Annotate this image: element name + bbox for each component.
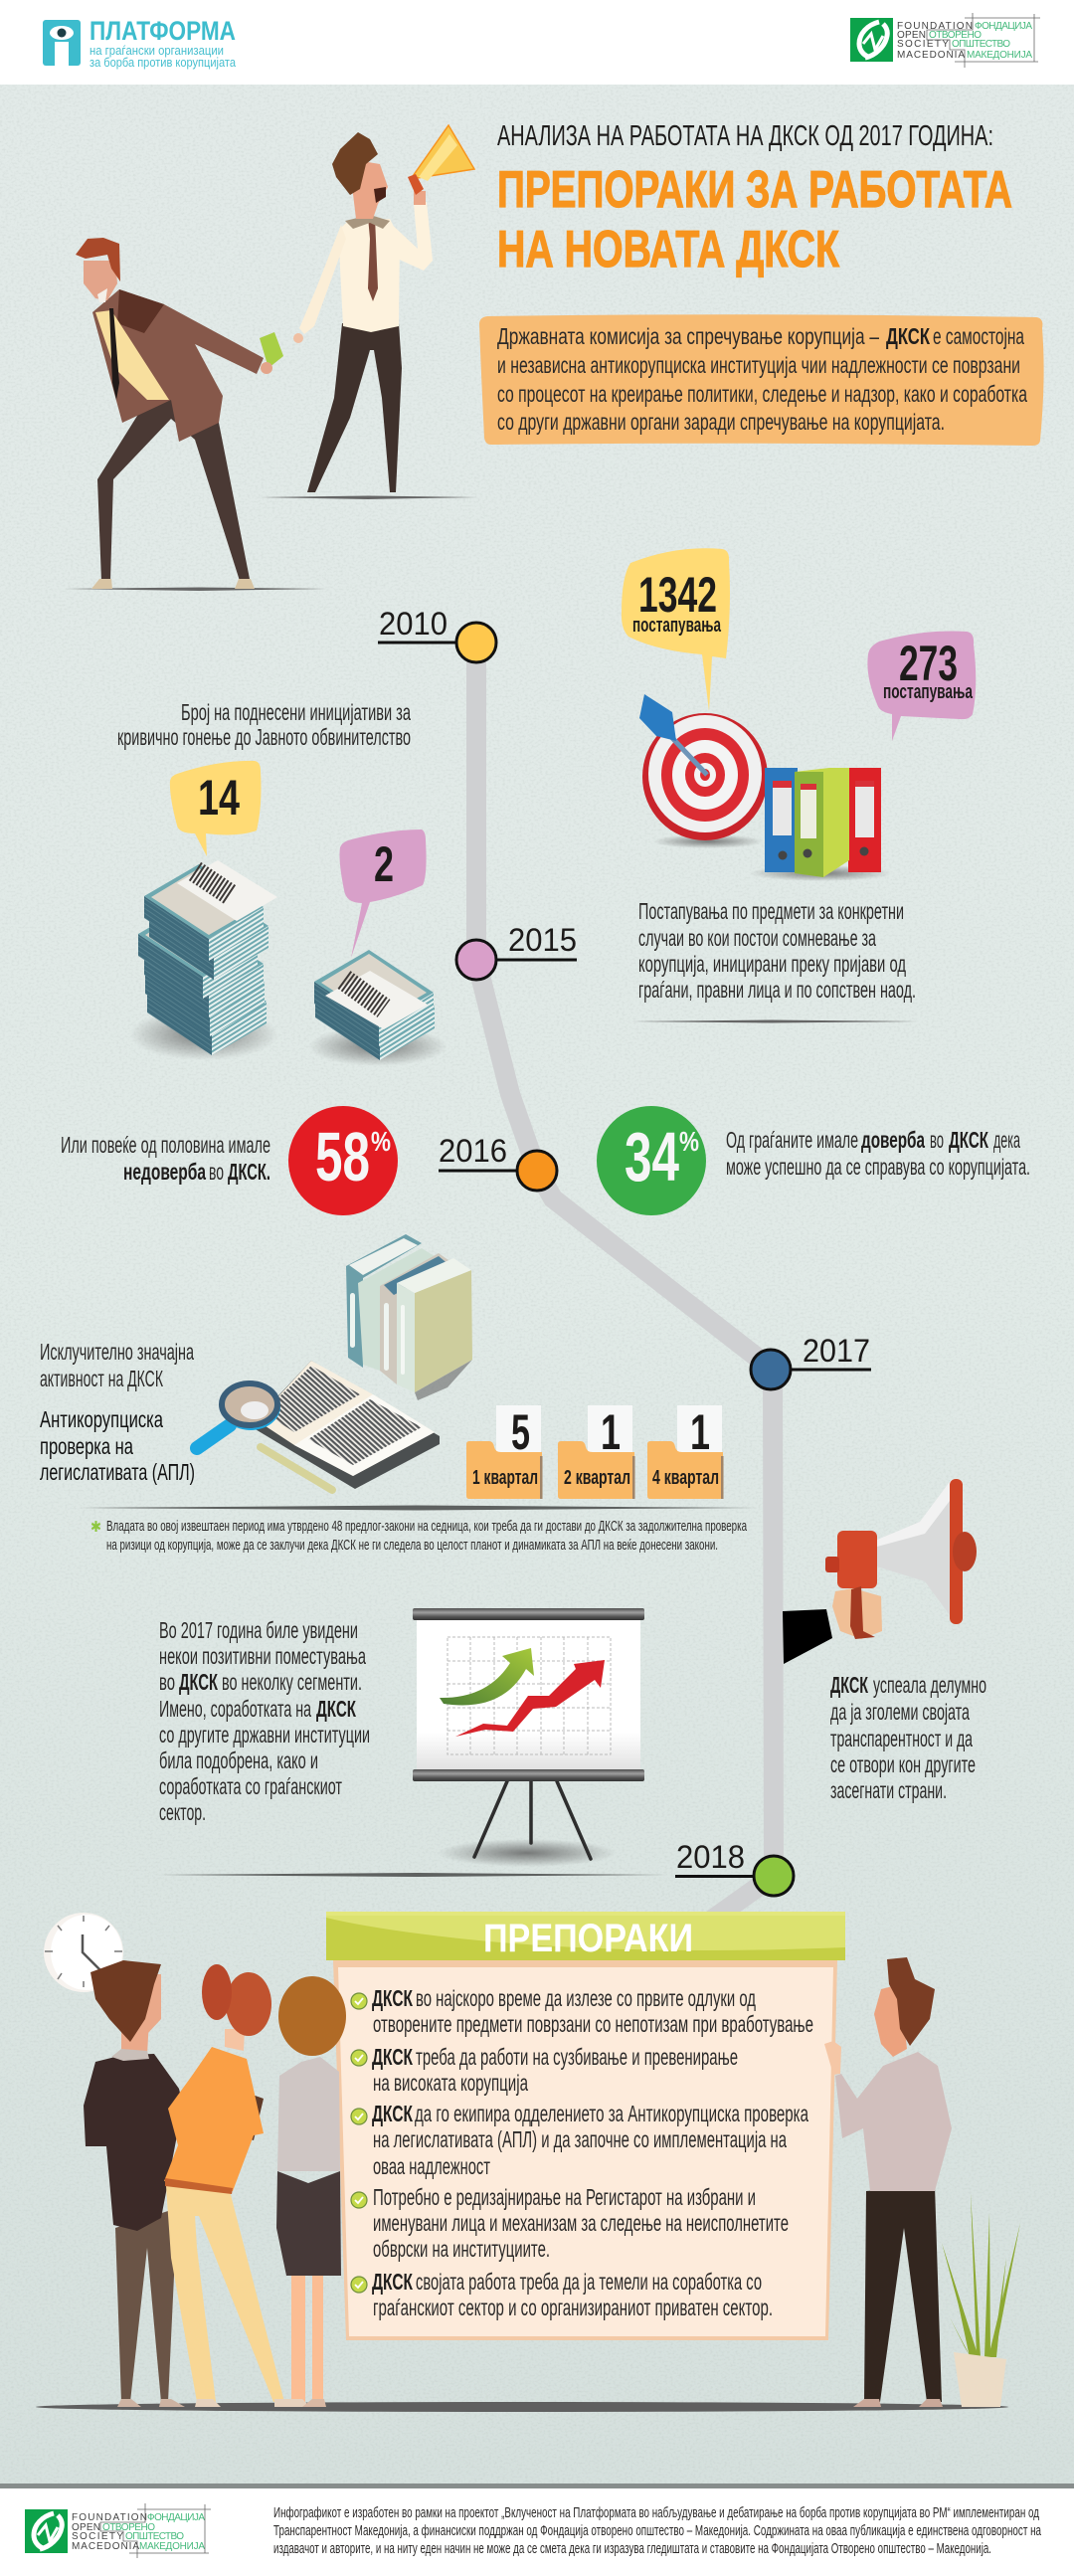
logo name: ПЛАТФОРМА (90, 16, 236, 46)
recommendation 3: ДКСК (372, 2101, 414, 2126)
text: proceedings (638, 898, 916, 1003)
logo lettering: SOCIETY (897, 39, 949, 50)
folder: 1st quarter (466, 1404, 543, 1499)
shoes (195, 2399, 221, 2407)
bubble (622, 548, 730, 711)
text: APL activity (40, 1339, 195, 1485)
money (260, 332, 283, 368)
text: недоверба (123, 1159, 206, 1185)
shadow (438, 1839, 617, 1867)
intro text (497, 323, 1027, 435)
logo lettering: МАКЕДОНИЈА (139, 2541, 205, 2552)
neck (121, 2019, 149, 2055)
recommendation 3: оваа надлежност (373, 2153, 490, 2179)
icon: flip chart with arrows (413, 1608, 644, 1867)
legs (474, 1781, 591, 1859)
icon: green square (850, 18, 893, 62)
text (61, 1132, 270, 1185)
text: proceedings: корупција, иницирани преку пријави од (638, 951, 906, 977)
green circle (597, 1106, 706, 1215)
text: positive shifts: некои позитивни поместувања (159, 1643, 366, 1669)
top sheet (325, 971, 428, 1029)
shoes (853, 2399, 881, 2407)
text: Од граѓаните имале (726, 1127, 858, 1153)
text: доверба (861, 1127, 925, 1153)
text: initiatives: Број на поднесени иницијативи за (181, 699, 411, 725)
text: transparency: транспарентност и да (830, 1726, 973, 1751)
recommendation 1 (351, 1985, 813, 2037)
text: transparency: да ја зголеми својата (830, 1699, 970, 1725)
text: во (209, 1159, 224, 1185)
recommendation 4 (351, 2184, 789, 2262)
recommendation 1: ДКСК (372, 1985, 414, 2011)
text: APL activity: активност на ДКСК (40, 1366, 163, 1391)
panel body (333, 1960, 837, 2340)
neck (225, 2029, 245, 2051)
percent sign: % (679, 1126, 699, 1157)
connector (439, 1170, 518, 1172)
recommendation 2: треба да работи на сузбивање и превенирање (416, 2044, 738, 2070)
icon: green square (25, 2509, 68, 2553)
logo lettering: ОТВОРЕНО (929, 30, 982, 41)
shoes (117, 2399, 141, 2407)
stat: 58 percent distrust (61, 1106, 398, 1215)
hair (278, 1976, 346, 2056)
illustration: man presenting (824, 1957, 952, 2407)
text: positive shifts: со другите државни институции (159, 1722, 370, 1748)
icon: open book with magnifier (197, 1361, 440, 1490)
tie (368, 217, 378, 301)
logo lettering (72, 2503, 211, 2558)
logo lettering: ОПШТЕСТВО (952, 39, 1010, 50)
text: APL activity: проверка на (40, 1433, 133, 1459)
text: positive shifts: сектор. (159, 1799, 206, 1825)
stat: 34 percent trust (597, 1106, 1030, 1215)
horn rim (950, 1479, 963, 1624)
text: APL activity: Исклучително значајна (40, 1339, 194, 1365)
title block (497, 120, 1012, 278)
right text block (308, 1399, 422, 1465)
value: 58 (315, 1118, 370, 1196)
text: positive shifts: Во 2017 година биле увидени (159, 1617, 358, 1643)
logo lettering: MACEDONIA (72, 2541, 139, 2552)
shirt (835, 2052, 952, 2191)
text (726, 1127, 1030, 1180)
icon: target with dart (639, 694, 768, 848)
legs (291, 2274, 305, 2403)
recommendation 3 (351, 2101, 808, 2179)
blades (942, 2193, 1020, 2357)
milestone: 2010 (378, 606, 496, 662)
recommendation 5 (351, 2269, 773, 2320)
text: transparency: успеала делумно (873, 1672, 986, 1698)
text: transparency: засегнати страни. (830, 1777, 947, 1803)
logo lettering: FOUNDATION (897, 21, 973, 32)
logo tagline: на граѓански организации (90, 43, 224, 58)
timeline line (476, 643, 774, 1934)
text: positive shifts: Имено, соработката на (159, 1696, 311, 1722)
text: positive shifts: ДКСК (316, 1696, 357, 1722)
paper (677, 1405, 722, 1461)
logo lettering: SOCIETY (72, 2531, 123, 2542)
headline line two: НА НОВАТА ДКСК (497, 221, 839, 278)
text: proceedings: Постапувања по предмети за конкретни (638, 898, 904, 924)
horn (877, 1479, 956, 1623)
logo tagline: за борба против корупцијата (90, 55, 237, 70)
recommendation 4: именувани лица и механизам за следење на неисполнетите (373, 2210, 789, 2236)
shirt (277, 2057, 340, 2171)
top sheet (177, 860, 277, 921)
shirt (95, 310, 169, 400)
text: transparency: ДКСК (830, 1672, 869, 1698)
folder shape (466, 1441, 542, 1499)
lowered arm (299, 225, 346, 334)
shoes (91, 579, 112, 589)
hand (832, 1588, 882, 1639)
recommendation 2 (351, 2044, 738, 2096)
body (837, 1531, 877, 1588)
illustration: ground shadow (36, 2402, 1008, 2412)
icon: upright books (346, 1234, 472, 1400)
left text block (264, 1366, 360, 1432)
logo: Foundation Open Society Macedonia (850, 13, 1040, 68)
connector (378, 641, 457, 644)
pages (257, 1361, 435, 1476)
value: 34 (625, 1118, 679, 1196)
recommendation 1: отворените предмети поврзани со непотизам при вработување (373, 2011, 813, 2037)
folder shape (558, 1441, 634, 1499)
callout: 2 (340, 829, 427, 958)
head (84, 261, 117, 300)
intro box (479, 314, 1044, 446)
text: APL activity: легислативата (АПЛ) (40, 1459, 195, 1485)
year: 2010 (379, 606, 448, 642)
paper (588, 1405, 632, 1461)
milestone: 2018 (675, 1839, 794, 1896)
top (164, 2047, 264, 2191)
logo lettering: MACEDONIA (897, 50, 965, 61)
check icon (351, 2109, 367, 2124)
number: 273 (899, 636, 958, 691)
illustration: man hiding money (65, 238, 327, 591)
collar (111, 2049, 149, 2061)
footnote: laws review: на ризици од корупција, може да се заклучи дека ДКСК не ги следела во целост планот и динамиката за АПЛ на веќе донесени закони. (106, 1538, 718, 1554)
trousers (864, 2186, 942, 2402)
marker (456, 940, 496, 980)
bubble (867, 631, 976, 741)
green binder (795, 768, 849, 877)
illustration: man in black jacket (84, 1960, 190, 2407)
text: дека (993, 1127, 1020, 1153)
text: во (930, 1127, 944, 1153)
number: 5 (511, 1404, 530, 1460)
logo lettering: МАКЕДОНИЈА (967, 50, 1032, 61)
number: 2 (374, 836, 394, 892)
text: APL activity: Антикорупциска (40, 1406, 163, 1432)
icon: keyhole eye (43, 20, 81, 66)
logo lettering: FOUNDATION (72, 2512, 147, 2523)
panel: intro (479, 314, 1044, 446)
dart (656, 721, 707, 775)
recommendation 5: ДКСК (372, 2269, 414, 2295)
connector (496, 959, 577, 961)
logo lettering (897, 13, 1040, 68)
trousers (166, 2186, 284, 2402)
sleeve (783, 1609, 832, 1664)
text: Или повеќе од половина имале (61, 1132, 270, 1158)
red arrow (455, 1660, 605, 1737)
year: 2015 (508, 922, 577, 958)
logo lettering: ФОНДАЦИЈА (147, 2512, 205, 2523)
ground (65, 587, 327, 591)
marker (517, 1151, 557, 1191)
text: initiatives: кривично гонење до Јавното обвинителство (117, 724, 411, 750)
paper (496, 1405, 541, 1461)
illustration: man with megaphone (261, 125, 477, 499)
year: 2016 (439, 1133, 507, 1169)
cover (254, 1361, 440, 1489)
yoke (117, 289, 164, 333)
recommendation 1: во најскоро време да излезе со првите одлуки од (416, 1985, 756, 2011)
recommendation 2: ДКСК (372, 2044, 414, 2070)
label: постапувања (883, 681, 974, 703)
head (350, 159, 388, 219)
bullet: ✱ (90, 1519, 101, 1536)
marker (754, 1856, 794, 1896)
clock hands (83, 1934, 101, 1971)
bottom bar (413, 1769, 644, 1781)
pen (261, 1447, 332, 1490)
grid (448, 1637, 611, 1754)
milestone: 2015 (456, 922, 577, 980)
jacket (84, 2054, 190, 2231)
text: ДКСК. (228, 1159, 270, 1185)
callout: 1342 (622, 548, 730, 711)
belt (165, 2178, 233, 2194)
note text: Владата во овој извештаен период има утврдено 48 предлог-закони на седница, кои треба да ги достави до ДКСК за задолжителна проверка (106, 1519, 748, 1535)
ground (261, 495, 477, 499)
banner (326, 1912, 845, 1960)
percent sign: % (371, 1126, 391, 1157)
book three (380, 1253, 455, 1384)
hand (824, 2041, 841, 2075)
label: постапувања (632, 615, 722, 637)
connector (675, 1875, 756, 1878)
callout: 14 (170, 761, 261, 856)
check icon (351, 2277, 367, 2293)
logo tagline (90, 43, 237, 70)
recommendation 5: својата работа треба да ја темели на соработка со (416, 2269, 762, 2295)
trousers (307, 323, 402, 492)
text: positive shifts (159, 1617, 370, 1825)
recommendation 4: Потребно е редизајнирање на Регистарот на избрани и (373, 2184, 756, 2210)
book one (346, 1234, 422, 1368)
sheet (417, 1620, 640, 1769)
number: 1342 (638, 567, 717, 623)
red binder (848, 768, 881, 872)
recommendation 4: обврски на институциите. (373, 2236, 550, 2262)
text: initiatives (117, 699, 411, 750)
marker (751, 1350, 791, 1389)
folder: 2nd quarter (558, 1404, 634, 1499)
recommendation 2: на високата корупција (373, 2070, 528, 2096)
head (874, 1984, 907, 2057)
red circle (288, 1106, 398, 1215)
number: 1 (690, 1404, 710, 1460)
footer logo: Foundation Open Society Macedonia (25, 2503, 211, 2558)
megaphone (411, 125, 474, 179)
recommendation 3: на легислативата (АПЛ) и да започне со имплементација на (373, 2126, 787, 2152)
shirt (339, 219, 400, 332)
icon: megaphone in hand (783, 1479, 977, 1664)
head (131, 1974, 161, 2034)
label: 2 квартал (564, 1467, 630, 1489)
year: 2017 (803, 1333, 870, 1369)
book (230, 2092, 264, 2140)
text: ДКСК (949, 1127, 989, 1153)
label: 4 квартал (652, 1467, 719, 1489)
number: 1 (601, 1404, 621, 1460)
book four (415, 1270, 472, 1392)
intro text: е самостојна (933, 323, 1024, 349)
jacket (92, 289, 264, 442)
check icon (351, 2050, 367, 2066)
number: 14 (198, 770, 240, 826)
logo: Platforma (43, 16, 237, 70)
illustration: potted plant (942, 2193, 1020, 2407)
legs (97, 400, 250, 581)
intro text: Државната комисија за спречување корупција – (497, 323, 879, 349)
bubble (170, 761, 261, 856)
recommendation 5: граѓанскиот сектор и со организираниот приватен сектор. (373, 2295, 773, 2320)
banner title: ПРЕПОРАКИ (483, 1917, 693, 1960)
recommendation 3: да го екипира одделението за Антикорупциска проверка (415, 2101, 808, 2126)
text: transparency (830, 1672, 986, 1803)
green arrow (440, 1648, 534, 1706)
footer rule (0, 2484, 1074, 2488)
icon: tall document stack (129, 860, 278, 1060)
marker (456, 623, 496, 662)
magnifier (197, 1382, 280, 1448)
skirt (276, 2171, 341, 2276)
logo lettering: ОТВОРЕНО (102, 2522, 155, 2533)
logo lettering: ФОНДАЦИЈА (975, 21, 1032, 32)
icon: binders (749, 768, 892, 881)
logo lettering: ОПШТЕСТВО (125, 2531, 184, 2542)
text: transparency: се отвори кон другите (830, 1751, 976, 1777)
callout: 273 (867, 631, 976, 741)
illustration: wall clock (44, 1913, 123, 1992)
book two (358, 1248, 438, 1371)
intro text: ДКСК (886, 323, 931, 349)
text: positive shifts: во неколку сегменти. (222, 1669, 362, 1695)
logo lettering: OPEN (72, 2522, 100, 2533)
icon: small document stack (308, 950, 448, 1066)
text: positive shifts: соработката со граѓанскиот (159, 1773, 342, 1799)
illustration: woman with skirt (276, 1976, 346, 2407)
label: 1 квартал (472, 1467, 538, 1489)
footer disclaimer (273, 2504, 1041, 2557)
milestone: 2016 (439, 1133, 557, 1191)
collar (345, 215, 390, 229)
logo lettering: OPEN (897, 30, 926, 41)
hair (226, 1972, 271, 2036)
bubble (340, 829, 427, 958)
footnote: laws review (90, 1519, 748, 1554)
text: positive shifts: во (159, 1669, 175, 1695)
text: positive shifts: била подобрена, како и (159, 1748, 318, 1773)
illustration: woman in orange (164, 1964, 298, 2407)
check icon (351, 1993, 367, 2009)
shoes (280, 2399, 310, 2407)
panel: recommendations (326, 1912, 845, 2340)
folder: 4th quarter (647, 1404, 724, 1499)
check icon (351, 2192, 367, 2208)
blue binder (765, 768, 798, 872)
trousers (115, 2211, 175, 2402)
tie (109, 308, 119, 400)
text: positive shifts: ДКСК (179, 1669, 219, 1695)
pot (954, 2352, 1006, 2407)
connector (791, 1369, 871, 1371)
raised arm (388, 202, 433, 271)
milestone: 2017 (751, 1333, 871, 1389)
year: 2018 (676, 1839, 745, 1875)
text: proceedings: граѓани, правни лица и по сопствен наод. (638, 977, 916, 1003)
folder shape (647, 1441, 723, 1499)
top bar (413, 1608, 644, 1620)
text: proceedings: случаи во кои постои сомневање за (638, 925, 876, 951)
